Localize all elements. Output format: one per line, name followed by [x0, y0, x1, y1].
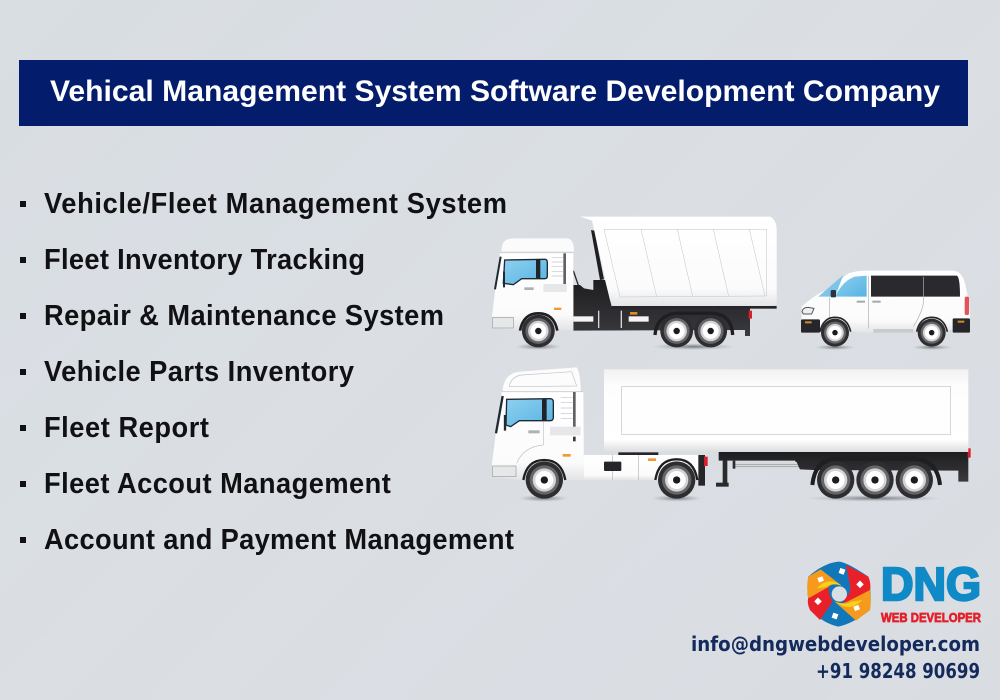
item: fleet management: Vehicle/Fleet Management System	[44, 187, 507, 219]
icon: logo swirl	[807, 562, 871, 627]
brand tagline: WEB DEVELOPER	[881, 611, 981, 625]
arches and wheels	[523, 460, 565, 480]
chassis	[573, 280, 750, 336]
item: payment management: Account and Payment Management	[44, 523, 515, 555]
item: parts inventory: Vehicle Parts Inventory	[44, 355, 354, 387]
icon: dump truck	[492, 217, 777, 350]
dump body	[580, 217, 777, 307]
contact: email: info@dngwebdeveloper.com	[691, 632, 980, 656]
item: fleet report: Fleet Report	[44, 411, 210, 443]
feature list	[20, 187, 515, 555]
trailer frame	[719, 452, 968, 482]
item: inventory tracking: Fleet Inventory Tracking	[44, 243, 365, 275]
icon: tanker truck	[492, 367, 971, 502]
item: account management: Fleet Accout Management	[44, 467, 391, 499]
tanker body	[604, 369, 968, 452]
arches and wheels	[520, 313, 557, 331]
title banner: Vehical Management System Software Development Company	[50, 75, 940, 108]
tractor chassis	[583, 455, 700, 480]
item: repair and maintenance: Repair & Maintenance System	[44, 299, 444, 331]
title banner	[19, 60, 968, 126]
brand name: DNG	[881, 558, 981, 610]
cab	[503, 367, 581, 392]
logo: DNG Web Developer	[807, 558, 981, 627]
cab	[502, 238, 574, 252]
icon: van	[801, 271, 970, 350]
